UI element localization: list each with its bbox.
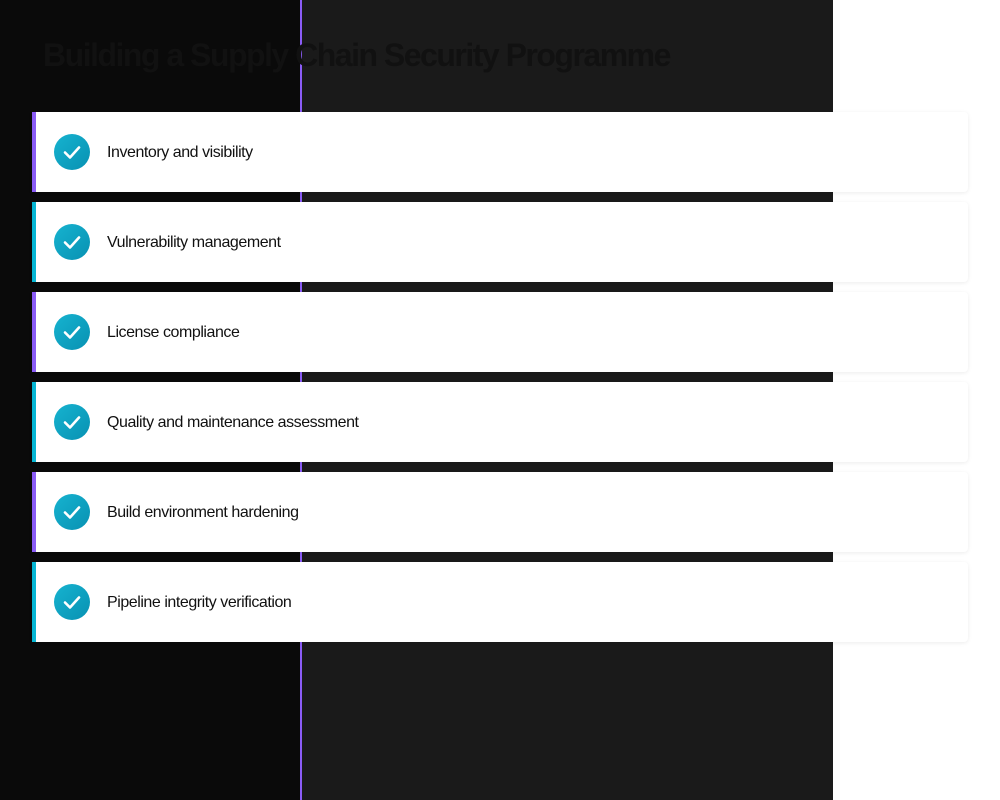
- icon: check: [54, 224, 90, 260]
- card: inventory: [32, 112, 968, 192]
- icon: check: [54, 134, 90, 170]
- card: pipeline: [32, 562, 968, 642]
- card: license: [32, 292, 968, 372]
- card: vulnerability: [32, 202, 968, 282]
- card: pipeline: Pipeline integrity verification: [107, 594, 291, 611]
- icon: check: [54, 494, 90, 530]
- card: vulnerability: Vulnerability management: [107, 234, 281, 251]
- card: inventory: Inventory and visibility: [107, 144, 253, 161]
- card: build: Build environment hardening: [107, 504, 299, 521]
- card: build: [32, 472, 968, 552]
- icon: check: [54, 584, 90, 620]
- card: quality: [32, 382, 968, 462]
- icon: check: [54, 314, 90, 350]
- card: quality: Quality and maintenance assessment: [107, 414, 359, 431]
- card: license: License compliance: [107, 324, 239, 341]
- icon: check: [54, 404, 90, 440]
- title: Building a Supply Chain Security Programme: [43, 37, 670, 73]
